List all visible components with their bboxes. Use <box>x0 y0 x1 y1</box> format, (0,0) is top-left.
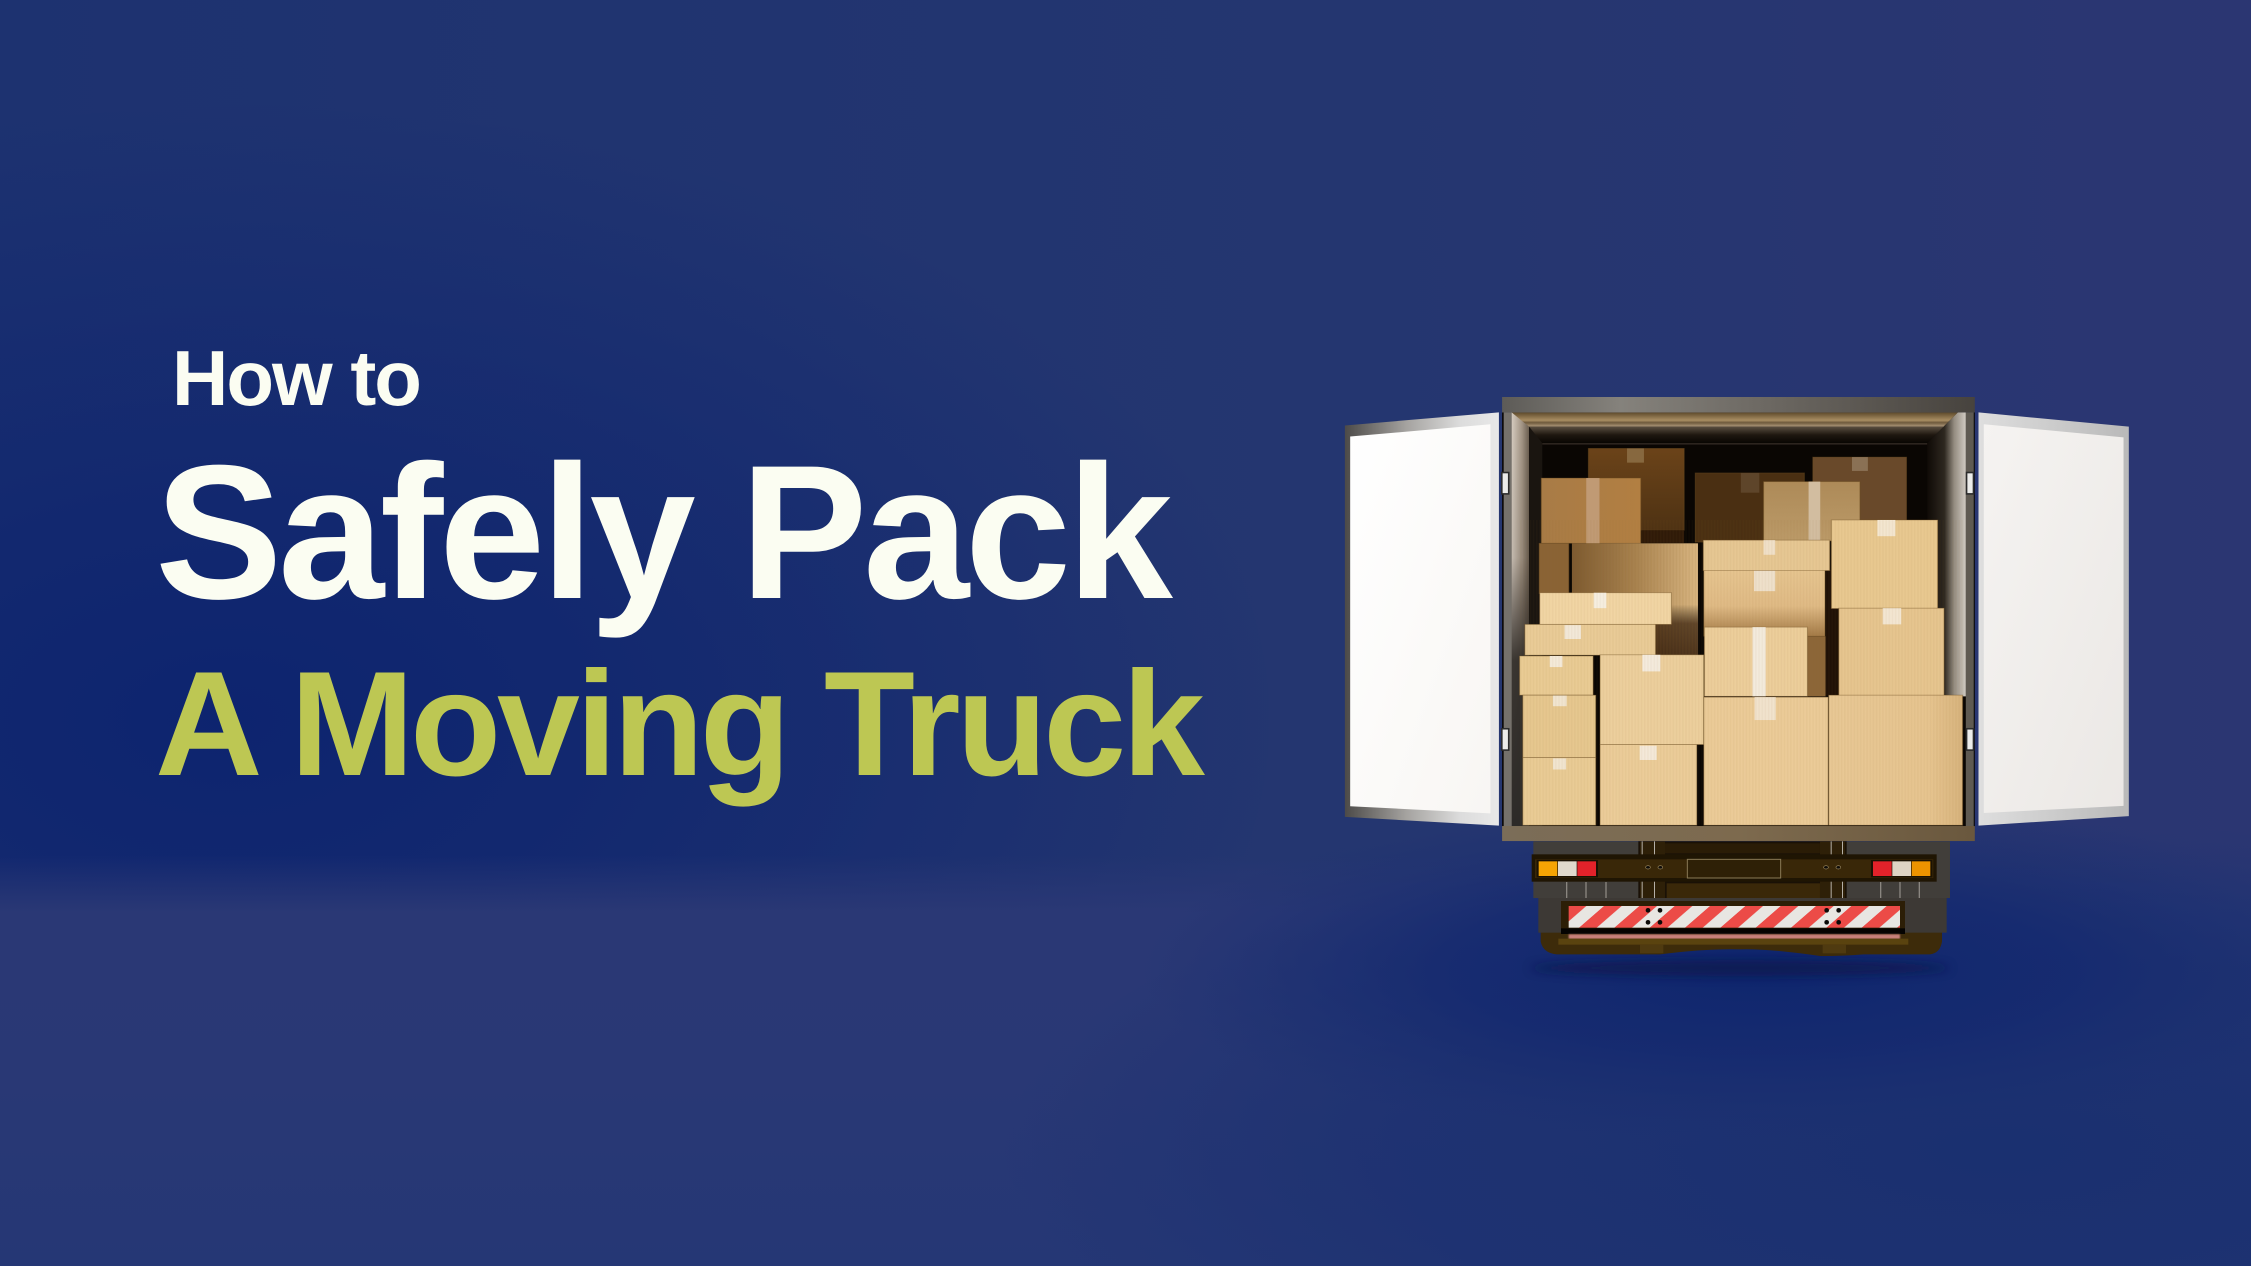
back row boxes <box>1541 448 1907 543</box>
box <box>1520 656 1593 695</box>
box <box>1600 655 1704 745</box>
rear lamp bar <box>1532 854 1937 882</box>
left lamps <box>1537 860 1598 877</box>
box <box>1523 758 1596 825</box>
box <box>1541 478 1641 543</box>
plate bolts <box>1646 908 1841 925</box>
truck shadow on ground <box>1530 960 1950 976</box>
box <box>1600 745 1697 825</box>
open right door <box>1978 412 2129 826</box>
wheels <box>1541 932 1942 956</box>
box <box>1704 697 1828 825</box>
box <box>1588 448 1684 543</box>
heading line: A Moving Truck: A Moving Truck <box>155 640 1206 807</box>
box <box>1813 457 1907 520</box>
box <box>1525 624 1656 655</box>
box <box>1764 482 1860 541</box>
heading line: How to: How to <box>172 334 420 422</box>
moving truck rear view <box>1345 397 2129 841</box>
box <box>1808 570 1840 696</box>
box <box>1695 473 1804 542</box>
title <box>155 334 1206 807</box>
mud flaps and chassis <box>1533 841 1950 933</box>
box <box>1572 543 1698 655</box>
cardboard texture <box>1520 520 1963 825</box>
truck undercarriage <box>1532 841 1950 956</box>
container bottom bar <box>1502 826 1975 841</box>
box <box>1523 695 1596 758</box>
reflective plate <box>1558 901 1908 953</box>
box <box>1703 540 1830 571</box>
door hinges <box>1501 472 1974 751</box>
box <box>1839 608 1944 696</box>
heading line: Safely Pack: Safely Pack <box>155 426 1174 639</box>
box <box>1540 593 1671 624</box>
open left door <box>1345 412 1499 826</box>
middle row boxes <box>1525 520 1944 696</box>
box <box>1831 520 1938 609</box>
front row boxes <box>1520 520 1963 825</box>
box <box>1829 695 1963 825</box>
lamp bar bolts <box>1646 866 1841 869</box>
box <box>1704 627 1808 696</box>
box <box>1704 569 1825 636</box>
cargo container interior <box>1502 412 1975 827</box>
box <box>1539 543 1569 594</box>
right lamps <box>1871 860 1932 877</box>
container top bar <box>1502 397 1975 412</box>
